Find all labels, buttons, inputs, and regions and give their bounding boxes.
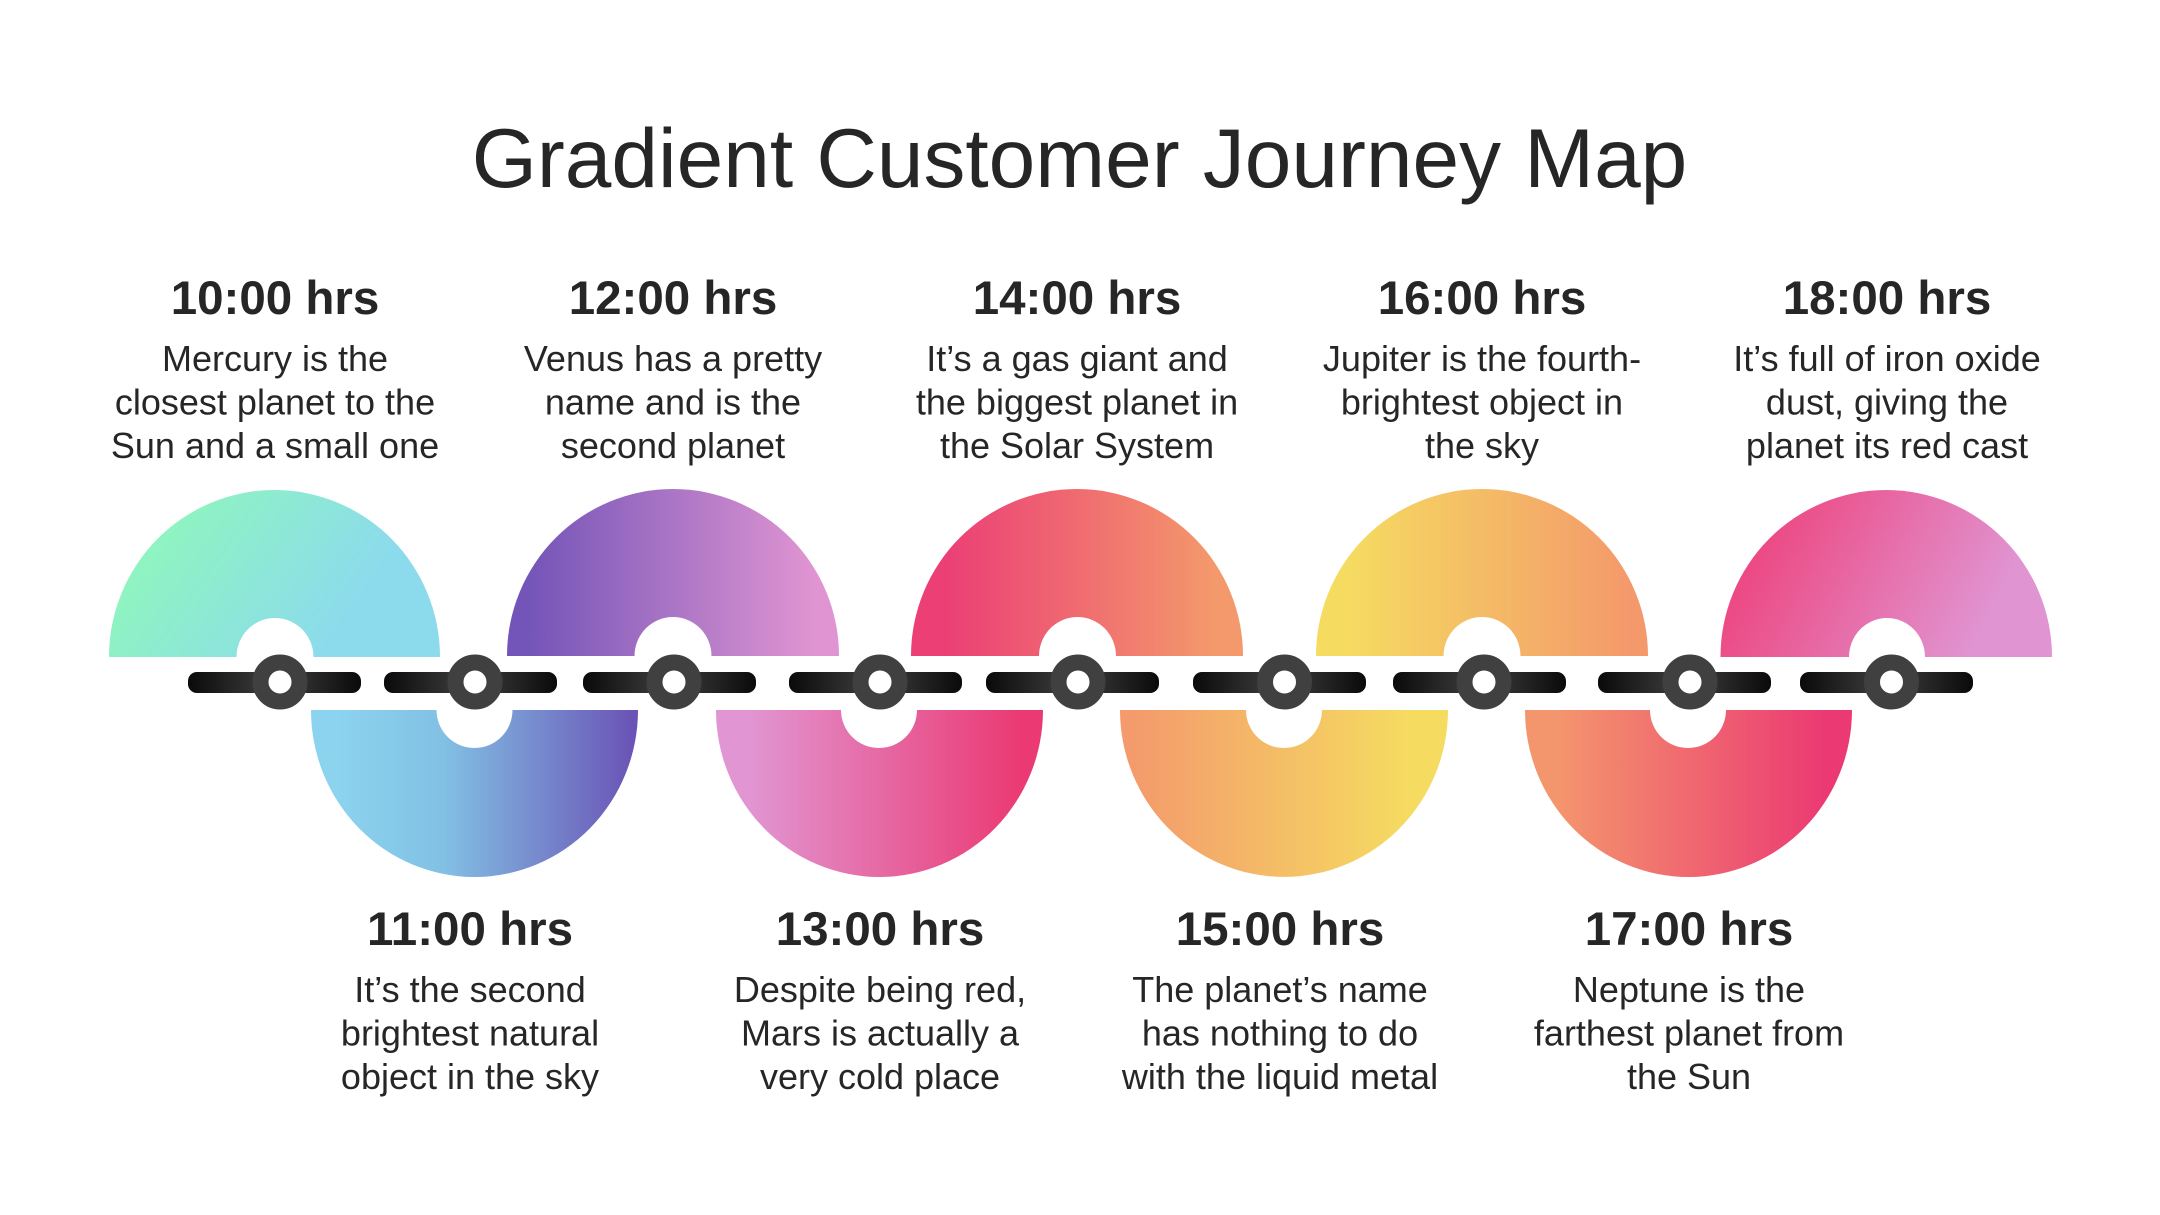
bottom arc 13:00 — [716, 710, 1043, 877]
text block 11:00: It’s the second — [354, 969, 586, 1010]
text block 15:00: has nothing to do — [1142, 1012, 1418, 1054]
text block 12:00: 12:00 hrs — [569, 272, 777, 325]
text block 14:00 — [916, 272, 1238, 466]
text block 18:00: planet its red cast — [1746, 425, 2028, 466]
text block 11:00: 11:00 hrs — [367, 903, 573, 956]
text block 10:00: closest planet to the — [115, 382, 435, 422]
text block 14:00: 14:00 hrs — [973, 272, 1181, 325]
text block 17:00: Neptune is the — [1573, 969, 1805, 1010]
title: Gradient Customer Journey Map — [472, 111, 1687, 205]
timeline marker 18:00 — [1800, 662, 1973, 702]
text block 11:00: brightest natural — [341, 1012, 599, 1054]
text block 10:00: Mercury is the — [162, 338, 388, 379]
text block 10:00: Sun and a small one — [111, 425, 439, 466]
timeline marker 14:00 — [986, 662, 1159, 702]
top arc 16:00 — [1316, 489, 1648, 656]
text block 10:00 — [111, 272, 439, 466]
text block 16:00: the sky — [1425, 425, 1539, 466]
text block 15:00 — [1121, 903, 1438, 1097]
text block 17:00: 17:00 hrs — [1585, 903, 1793, 956]
text block 13:00: Despite being red, — [734, 969, 1026, 1010]
timeline marker 16:00 — [1393, 662, 1566, 702]
top arc 12:00 — [507, 489, 839, 656]
text block 11:00 — [341, 903, 599, 1097]
text block 16:00: 16:00 hrs — [1378, 272, 1586, 325]
bottom arc 17:00 — [1525, 710, 1852, 877]
text block 17:00: the Sun — [1627, 1056, 1751, 1097]
text block 12:00: name and is the — [545, 382, 801, 422]
text block 15:00: with the liquid metal — [1121, 1056, 1438, 1097]
timeline marker 12:00 — [583, 662, 756, 702]
text block 18:00 — [1733, 272, 2041, 466]
bottom arc 11:00 — [311, 710, 638, 877]
text block 12:00: second planet — [561, 425, 785, 466]
text block 16:00: Jupiter is the fourth- — [1323, 338, 1641, 379]
text block 11:00: object in the sky — [341, 1056, 599, 1097]
text block 14:00: the Solar System — [940, 425, 1214, 466]
text block 14:00: the biggest planet in — [916, 382, 1238, 422]
text block 15:00: 15:00 hrs — [1176, 903, 1384, 956]
text block 18:00: It’s full of iron oxide — [1733, 338, 2041, 379]
text block 18:00: dust, giving the — [1766, 382, 2008, 422]
timeline marker 10:00 — [188, 662, 361, 702]
text block 17:00 — [1534, 903, 1844, 1097]
top arc 10:00 — [109, 490, 440, 657]
text block 13:00: 13:00 hrs — [776, 903, 984, 956]
timeline marker 11:00 — [384, 662, 557, 702]
timeline marker 13:00 — [789, 662, 962, 702]
text block 13:00: very cold place — [760, 1056, 1000, 1097]
text block 18:00: 18:00 hrs — [1783, 272, 1991, 325]
timeline marker 17:00 — [1598, 662, 1771, 702]
text block 12:00: Venus has a pretty — [524, 338, 822, 379]
text block 16:00 — [1323, 272, 1641, 466]
timeline marker 15:00 — [1193, 662, 1366, 702]
text block 14:00: It’s a gas giant and — [926, 338, 1228, 379]
top arc 18:00 — [1720, 490, 2052, 657]
text block 15:00: The planet’s name — [1132, 969, 1428, 1010]
top arc 14:00 — [911, 489, 1243, 656]
text block 17:00: farthest planet from — [1534, 1012, 1844, 1054]
bottom arc 15:00 — [1120, 710, 1448, 877]
text block 10:00: 10:00 hrs — [171, 272, 379, 325]
text block 12:00 — [524, 272, 822, 466]
text block 16:00: brightest object in — [1341, 382, 1623, 422]
text block 13:00 — [734, 903, 1026, 1097]
text block 13:00: Mars is actually a — [741, 1012, 1020, 1054]
